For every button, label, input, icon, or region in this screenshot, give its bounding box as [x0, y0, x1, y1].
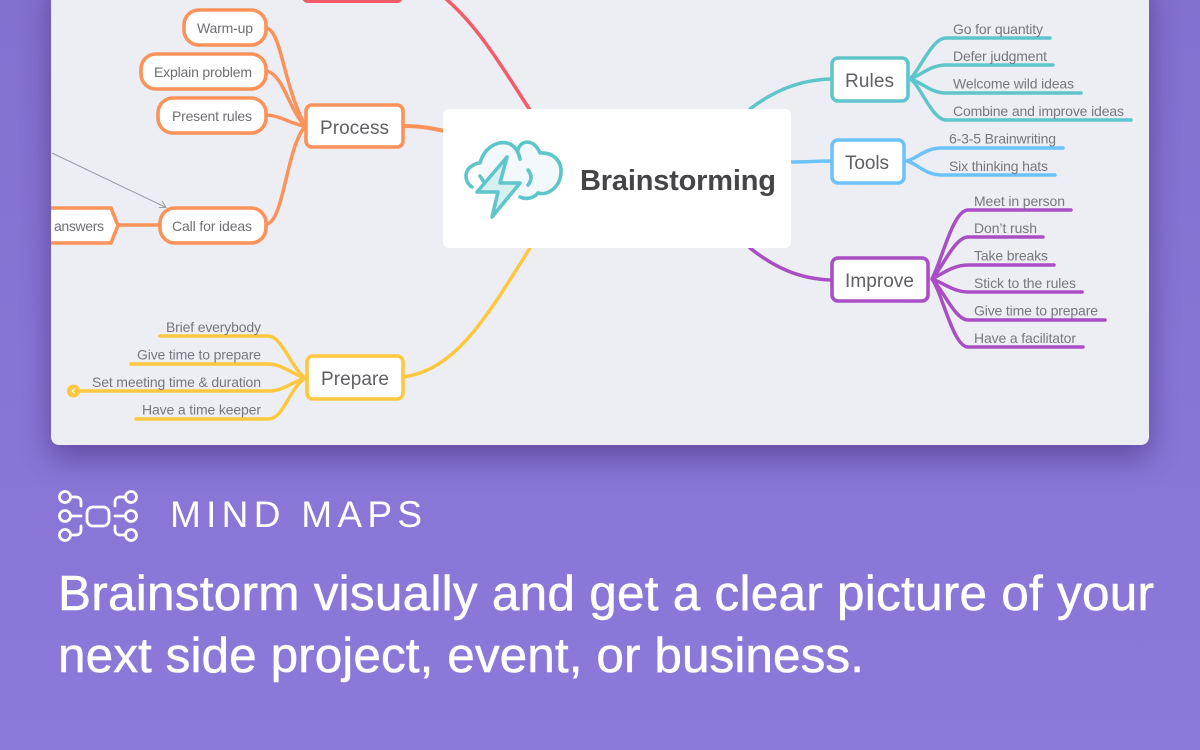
- headline text: next side project, event, or business.: [58, 628, 864, 683]
- branch: Process: [51, 10, 445, 243]
- icon: collapse marker: [67, 384, 80, 398]
- node: Prepare: [307, 356, 403, 399]
- branch: Prepare: [67, 248, 530, 419]
- node: Improve: Improve: [845, 271, 914, 292]
- branch: Rules: [750, 21, 1131, 120]
- headline text: [58, 566, 1154, 683]
- node: Present rules: [158, 98, 266, 133]
- label: Go for quantity: Go for quantity: [953, 21, 1043, 37]
- node: Call for ideas: Call for ideas: [172, 218, 252, 234]
- label: Don't rush: Don’t rush: [974, 220, 1037, 236]
- central topic: Brainstorming: [443, 109, 791, 248]
- heading: MIND MAPS: MIND MAPS: [170, 494, 422, 535]
- headline text: Brainstorm visually and get a clear picture of your: [58, 566, 1154, 621]
- branch: Improve: [750, 193, 1105, 347]
- node: answers: [51, 208, 118, 243]
- icon: storm cloud with lightning: [466, 142, 561, 217]
- node: Tools: Tools: [845, 153, 889, 174]
- label: Combine and improve ideas: Combine and improve ideas: [953, 103, 1124, 119]
- node: Call for ideas: [160, 208, 266, 243]
- label: 6-3-5 Brainwriting: 6-3-5 Brainwriting: [949, 130, 1056, 146]
- node: red branch, cropped: [302, 0, 403, 3]
- label: Have a facilitator: Have a facilitator: [974, 330, 1076, 346]
- icon: mind map glyph: [60, 492, 136, 540]
- label: Give time to prepare: Give time to prepare: [137, 346, 261, 362]
- link: central topic to red branch: [445, 0, 530, 110]
- node: Warm-up: Warm-up: [197, 20, 253, 36]
- node: Process: [306, 105, 403, 147]
- label: Stick to the rules: Stick to the rules: [974, 275, 1076, 291]
- node: Warm-up: [184, 10, 266, 45]
- node: Process: Process: [320, 118, 389, 139]
- label: Give time to prepare: Give time to prepare: [974, 302, 1098, 318]
- label: Set meeting time and duration: Set meeting time & duration: [92, 374, 261, 390]
- label: Meet in person: Meet in person: [974, 193, 1065, 209]
- label: Defer judgment: Defer judgment: [953, 48, 1047, 64]
- node: Explain problem: Explain problem: [154, 64, 252, 80]
- node: Tools: [832, 140, 904, 183]
- node: Present rules: Present rules: [172, 108, 252, 124]
- node: answers: answers: [54, 218, 104, 234]
- node: Improve: [832, 258, 928, 301]
- arrow: gray relationship: [52, 153, 166, 208]
- node: Explain problem: [141, 54, 266, 89]
- node: Rules: [832, 58, 908, 101]
- label: Welcome wild ideas: Welcome wild ideas: [953, 76, 1074, 92]
- label: Take breaks: Take breaks: [974, 248, 1048, 264]
- label: Six thinking hats: Six thinking hats: [949, 158, 1048, 174]
- label: Brief everybody: Brief everybody: [166, 319, 261, 335]
- central label: Brainstorming: [580, 165, 776, 197]
- panel: mind map canvas: [51, 0, 1149, 445]
- branch: Tools: [791, 130, 1063, 183]
- label: Have a time keeper: Have a time keeper: [142, 402, 261, 418]
- node: Prepare: Prepare: [321, 369, 389, 390]
- node: Rules: Rules: [845, 71, 894, 92]
